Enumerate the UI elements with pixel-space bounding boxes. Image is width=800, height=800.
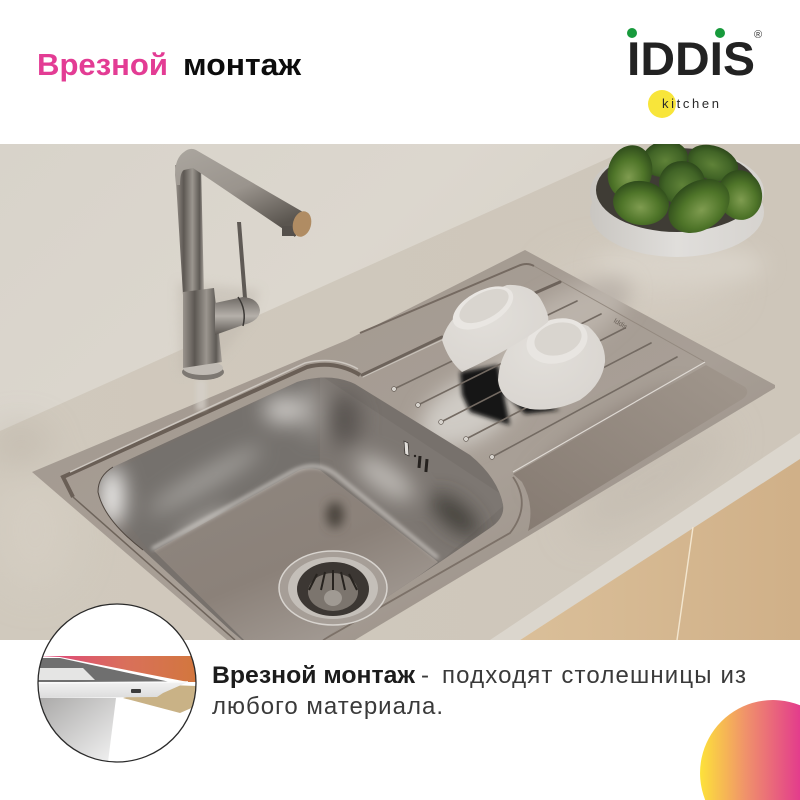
faucet base: [182, 369, 224, 380]
title: монтаж: [183, 47, 302, 82]
faucet lever rod: [237, 222, 247, 298]
avocado: [720, 170, 762, 220]
avocado: [613, 180, 669, 226]
faucet: [175, 149, 314, 380]
countertop front edge: [490, 433, 800, 640]
left back wall: [300, 379, 309, 382]
description text: Врезной монтаж: [212, 662, 416, 689]
right back wall: [501, 498, 503, 504]
faucet reflection on rim: [196, 380, 206, 410]
black reflection under bowls: [460, 365, 560, 425]
faucet lever: [215, 297, 260, 335]
wall: [0, 144, 640, 431]
photo: kitchen sink scene: [0, 137, 800, 640]
floor ridge highlights: [152, 466, 438, 558]
avocado: [668, 179, 730, 233]
overflow slot: [404, 441, 429, 472]
worktop cut edge: [123, 685, 196, 713]
countertop mottling: [15, 440, 25, 448]
engraved brand mark: Iddis: [612, 318, 629, 331]
inset circle: undermount cross-section: [38, 604, 200, 762]
avocado: [659, 161, 705, 205]
drainer reflections: [414, 274, 670, 455]
logo: IDDIS kitchen: [627, 28, 762, 118]
avocado: [688, 144, 738, 182]
spout end: [290, 209, 314, 239]
tray with avocados: [590, 137, 767, 257]
bowl floor: [154, 468, 438, 640]
bowl base shape: [98, 377, 503, 640]
description text: -: [421, 662, 429, 689]
title: [37, 47, 302, 82]
logo: IDDIS kitchen: IDDIS: [627, 32, 755, 85]
steel deck: [38, 658, 170, 682]
sink wall below: [38, 698, 116, 762]
description text: [212, 662, 746, 720]
sink bowl: [63, 361, 522, 640]
description text: подходят столешницы из: [442, 662, 746, 689]
groove end balls: [392, 387, 494, 459]
worktop surface: [38, 656, 200, 682]
avocado: [646, 144, 688, 177]
sink deck: [32, 250, 775, 640]
bowl rim highlight: [98, 467, 143, 550]
logo: IDDIS kitchen: ®: [754, 29, 762, 41]
title: Врезной: [37, 47, 168, 82]
faucet pipe: [175, 165, 204, 295]
raised border: [63, 365, 360, 497]
faucet aerator: [282, 226, 296, 236]
avocado: [608, 145, 652, 194]
gradient corner circle: [700, 700, 800, 800]
clip slot: [131, 689, 141, 693]
faucet shadow: [178, 284, 258, 350]
wood cabinet: [520, 459, 800, 640]
white bowl, right: [498, 312, 605, 410]
drain strainer: [279, 551, 387, 625]
countertop: [0, 144, 800, 640]
logo: IDDIS kitchen: kitchen: [662, 96, 721, 111]
faucet body: [183, 288, 222, 368]
faucet spout: [175, 149, 303, 237]
drainer lower recess: [513, 365, 747, 531]
steel edge: [38, 682, 188, 698]
tray shadow: [616, 250, 755, 278]
drainer grooves: [362, 282, 677, 457]
white bowl, left: [442, 277, 548, 372]
drainer raised panel outline: [360, 264, 534, 333]
description text: любого материала.: [212, 693, 443, 720]
